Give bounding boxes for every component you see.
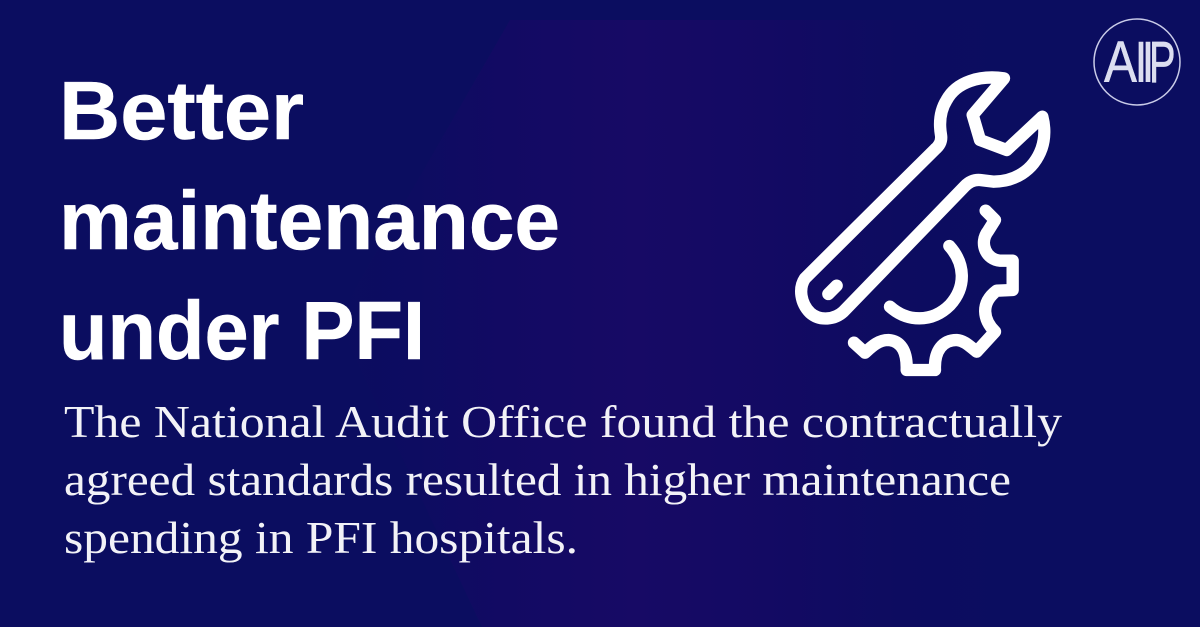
title: under PFI	[59, 284, 425, 377]
title: maintenance	[59, 174, 560, 267]
logo ring	[1094, 19, 1180, 105]
logo lettering: I	[1134, 30, 1148, 95]
icon: gear inner arc	[890, 246, 962, 318]
body text: spending in PFI hospitals.	[64, 512, 578, 563]
body text	[64, 396, 1062, 563]
icon: wrench outline	[801, 78, 1044, 318]
logo	[1094, 19, 1180, 105]
icon: gear teeth	[854, 211, 1013, 370]
logo lettering: I	[1141, 30, 1155, 95]
body text: agreed standards resulted in higher maintenance	[64, 454, 1011, 505]
logo lettering: A	[1104, 30, 1137, 95]
title	[59, 64, 560, 377]
body text: The National Audit Office found the contractually	[64, 396, 1062, 447]
icon: wrench and gear	[801, 78, 1044, 370]
logo lettering	[1104, 30, 1176, 95]
icon: wrench handle hole	[828, 286, 837, 294]
logo lettering: P	[1149, 30, 1176, 95]
title: Better	[59, 64, 304, 157]
